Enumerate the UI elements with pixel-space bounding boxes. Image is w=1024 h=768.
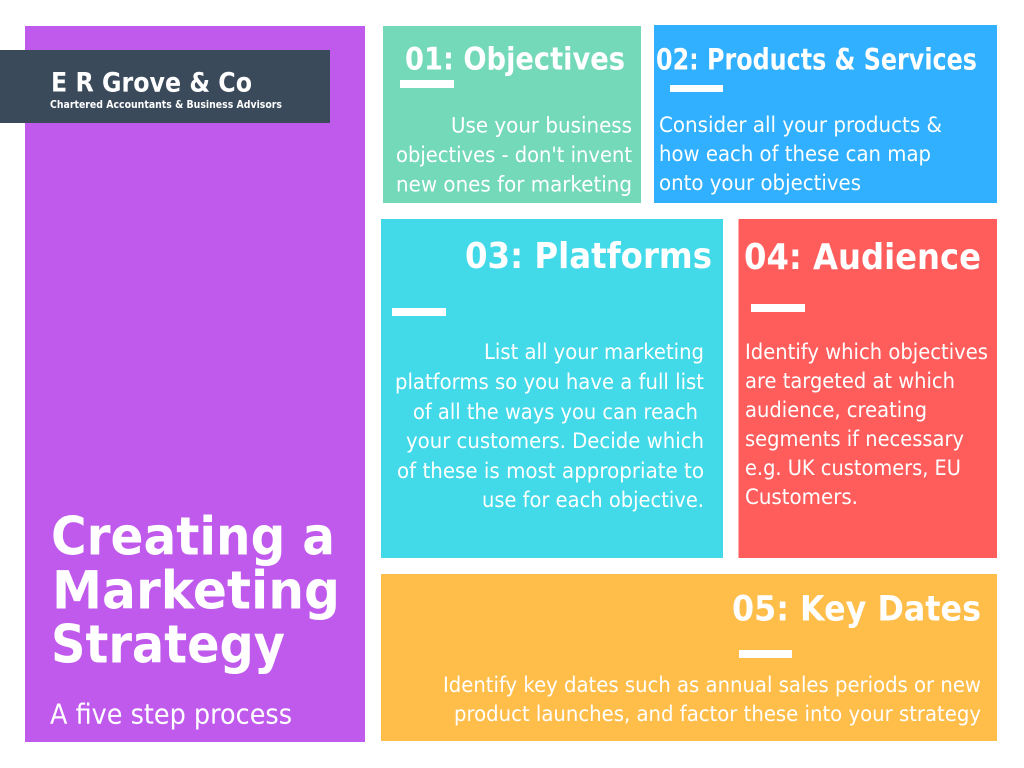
panel: title column xyxy=(25,26,365,742)
main title: Strategy xyxy=(51,614,285,676)
body text: 04: audience, creating xyxy=(745,398,927,423)
body text: 03: of these is most appropriate to xyxy=(397,459,704,484)
company name: E R Grove & Co xyxy=(51,68,252,98)
body text: 01: objectives - don't invent xyxy=(396,143,632,168)
body text: 01: Use your business xyxy=(451,114,632,138)
panel: 04 audience xyxy=(738,219,997,558)
body text: 04: e.g. UK customers, EU xyxy=(745,456,961,481)
body text: 03: your customers. Decide which xyxy=(406,429,704,454)
body text: 01: new ones for marketing xyxy=(396,172,632,198)
body text: 03: use for each objective. xyxy=(482,488,704,513)
main title xyxy=(51,506,340,676)
heading: 03: 03: Platforms xyxy=(465,236,712,277)
body text: 05: product launches, and factor these into your strategy xyxy=(454,702,981,727)
heading: 01: 01: Objectives xyxy=(405,42,625,78)
body text: 03: platforms so you have a full list xyxy=(395,370,704,395)
heading: 05: 05: Key Dates xyxy=(732,590,981,630)
subtitle: A five step process xyxy=(50,698,292,730)
panel: 01 objectives xyxy=(383,26,641,203)
company banner xyxy=(0,50,330,123)
body text: 04: are targeted at which xyxy=(745,369,955,394)
body text: 02 xyxy=(659,113,942,196)
body text: 03: of all the ways you can reach xyxy=(413,400,698,425)
body text: 01 xyxy=(396,114,632,198)
body text: 04 xyxy=(745,340,988,510)
body text: 05 xyxy=(443,673,981,727)
main title: Marketing xyxy=(52,560,340,622)
panel: 03 platforms xyxy=(381,219,723,558)
panel: 05 key dates xyxy=(381,574,997,741)
body text: 04: Customers. xyxy=(745,485,858,510)
body text: 03: List all your marketing xyxy=(484,340,704,365)
panel: 02 products and services xyxy=(654,25,997,203)
body text: 02: Consider all your products & xyxy=(659,113,942,138)
body text: 03 xyxy=(395,340,704,513)
body text: 04: Identify which objectives xyxy=(745,340,988,365)
body text: 02: onto your objectives xyxy=(659,171,861,196)
main title: Creating a xyxy=(51,506,335,568)
body text: 05: Identify key dates such as annual sales periods or new xyxy=(443,673,981,698)
body text: 04: segments if necessary xyxy=(745,427,964,452)
body text: 02: how each of these can map xyxy=(659,142,931,167)
heading: 04: 04: Audience xyxy=(744,237,981,278)
company tagline: Chartered Accountants & Business Advisors xyxy=(50,99,282,111)
